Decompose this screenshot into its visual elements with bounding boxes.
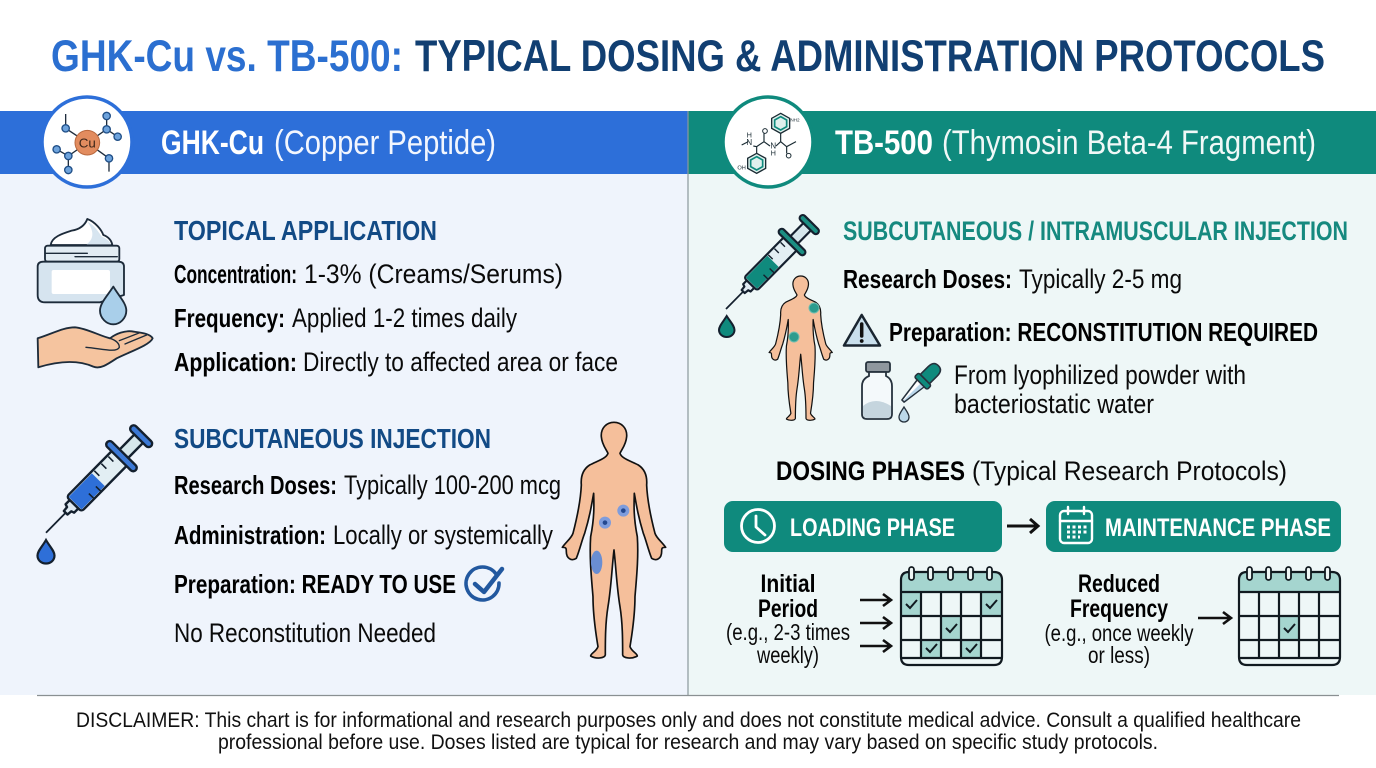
text: concentration: Concentration: — [174, 259, 297, 289]
title: GHK-Cu vs. TB-500: — [51, 32, 403, 81]
text: from lyophilized powder: bacteriostatic water — [954, 389, 1154, 419]
calendar: loading schedule — [901, 567, 1002, 665]
icon: blue syringe — [32, 420, 158, 564]
icon: check circle — [466, 567, 502, 600]
text: reduced frequency: or less) — [1088, 642, 1150, 668]
text: reduced frequency — [1044, 570, 1194, 668]
icon: TB-500 molecule: H — [747, 131, 752, 140]
icon: TB-500 molecule: H — [771, 148, 776, 157]
panel header: TB-500: TB-500 — [835, 124, 933, 162]
icon: body with injection sites — [562, 422, 666, 658]
text: initial period: (e.g., 2-3 times — [726, 619, 850, 645]
icon: copper molecule — [42, 97, 132, 187]
panel header: GHK-Cu — [0, 111, 688, 174]
arrow: loading to maintenance — [1007, 519, 1038, 533]
icon: dropper — [897, 359, 945, 422]
icon: teal syringe — [714, 210, 824, 337]
disclaimer: professional before use. Doses listed are typical for research and may vary based on specific study protocols. — [218, 731, 1158, 754]
calendar: maintenance schedule — [1239, 567, 1340, 665]
banner: loading phase: LOADING PHASE — [790, 514, 955, 542]
text: preparation ready to use: Preparation: READY TO USE — [174, 569, 456, 599]
text: concentration: 1-3% (Creams/Serums) — [304, 259, 563, 289]
text: application: Directly to affected area or face — [303, 347, 618, 377]
text: research doses: Typically 2-5 mg — [1019, 264, 1182, 294]
panel: GHK-Cu — [0, 97, 688, 695]
text: frequency: Frequency: — [174, 303, 285, 333]
text: reduced frequency: Frequency — [1070, 595, 1168, 623]
panel header: GHK-Cu: GHK-Cu — [161, 124, 264, 162]
icon: TB-500 molecule: OH — [737, 165, 746, 171]
icon: cream jar and hand — [38, 219, 153, 367]
panel header: TB-500: (Thymosin Beta-4 Fragment) — [942, 124, 1316, 162]
icon: vial — [862, 362, 892, 419]
text: from lyophilized powder — [954, 360, 1246, 419]
title — [51, 32, 1325, 81]
text: research doses: Typically 100-200 mcg — [344, 470, 561, 500]
disclaimer — [76, 709, 1301, 754]
text: reduced frequency: (e.g., once weekly — [1044, 620, 1194, 646]
text: research doses: Research Doses: — [174, 470, 337, 500]
arrow: reduced dose — [1198, 612, 1231, 624]
icon: TB-500 molecule: N — [770, 141, 776, 150]
text: initial period: Period — [758, 595, 818, 623]
text: frequency — [174, 303, 518, 333]
icon: body with injection sites — [769, 276, 832, 420]
text: administration — [174, 520, 554, 550]
heading: dosing phases — [776, 456, 1287, 486]
heading: dosing phases: DOSING PHASES — [776, 456, 965, 486]
text: initial period: weekly) — [756, 642, 819, 668]
arrows: three weekly doses — [860, 594, 891, 652]
text: administration: Administration: — [174, 520, 326, 550]
text: research doses — [174, 470, 561, 500]
disclaimer: DISCLAIMER: This chart is for informational and research purposes only and does not constitute medical advice. Consult a qualified healthcare — [76, 709, 1301, 732]
text: reduced frequency: Reduced — [1078, 570, 1160, 598]
text: research doses — [843, 264, 1182, 294]
icon: copper molecule: Cu — [79, 135, 96, 150]
text: application — [174, 347, 618, 377]
text: concentration — [174, 259, 563, 289]
text: no reconstitution: No Reconstitution Needed — [174, 618, 436, 648]
panel header: TB-500 — [688, 111, 1376, 174]
text: administration: Locally or systemically — [333, 520, 554, 550]
icon: TB-500 molecule: N — [746, 138, 752, 147]
heading: subcutaneous injection: SUBCUTANEOUS INJECTION — [174, 423, 491, 454]
banner: maintenance phase: MAINTENANCE PHASE — [1105, 514, 1331, 542]
panel: TB-500 — [688, 97, 1376, 695]
text: initial period — [726, 570, 850, 668]
heading: topical application: TOPICAL APPLICATION — [174, 215, 437, 246]
text: frequency: Applied 1-2 times daily — [292, 303, 518, 333]
text: from lyophilized powder: From lyophilized powder with — [954, 360, 1246, 390]
banner: loading phase — [724, 501, 1002, 552]
heading: dosing phases: (Typical Research Protocols) — [972, 456, 1287, 486]
icon: TB-500 molecule: NH2 — [790, 117, 800, 122]
banner: maintenance phase — [1046, 501, 1341, 552]
text: initial period: Initial — [760, 570, 816, 598]
text: research doses: Research Doses: — [843, 264, 1012, 294]
icon: warning triangle — [844, 315, 880, 346]
panel header: GHK-Cu: (Copper Peptide) — [274, 124, 496, 162]
icon: TB-500 molecule — [723, 97, 813, 187]
text: application: Application: — [174, 347, 297, 377]
